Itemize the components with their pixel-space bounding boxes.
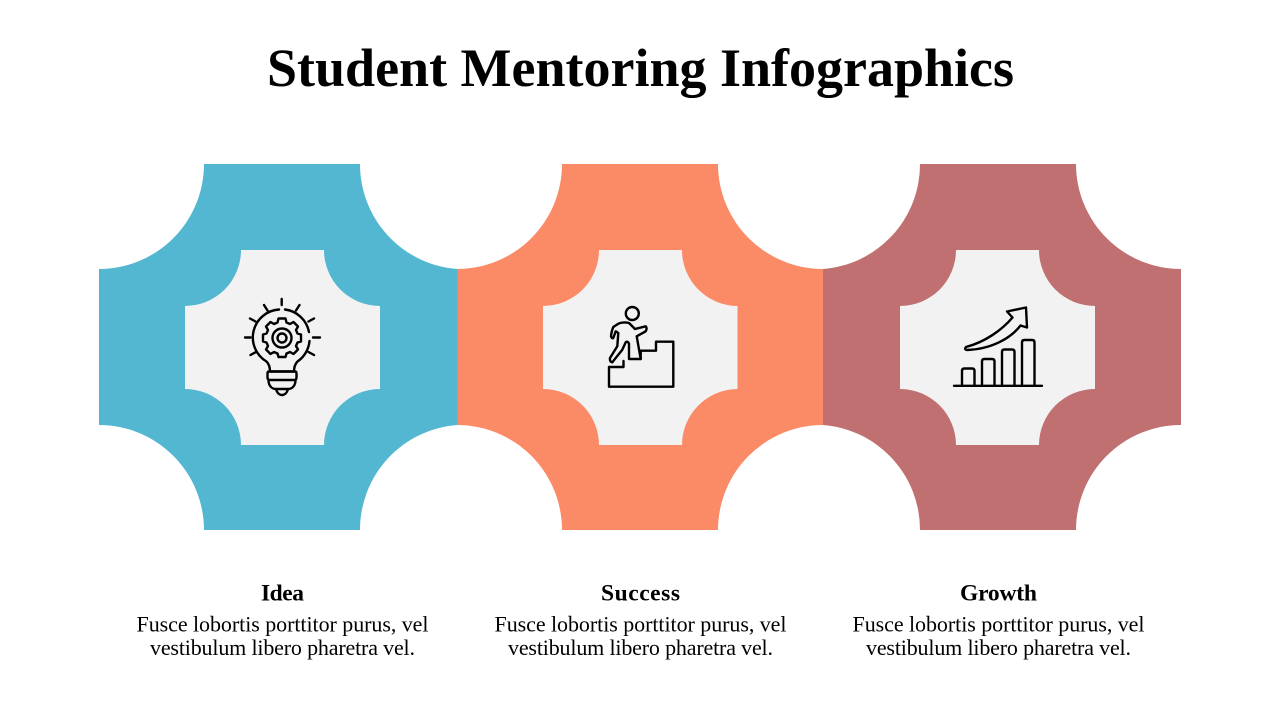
- inner tile: [543, 250, 738, 445]
- icon: rising bar chart with arrow: [954, 308, 1042, 386]
- panel: idea: [99, 164, 458, 660]
- description: success: [494, 612, 786, 660]
- description: growth: vestibulum libero pharetra vel.: [866, 635, 1131, 660]
- panel: growth: [823, 164, 1181, 660]
- description: growth: Fusce lobortis porttitor purus, vel: [852, 612, 1144, 636]
- panel: success: [458, 164, 823, 660]
- label: growth heading: Growth: [960, 580, 1037, 606]
- label: success heading: Success: [601, 580, 680, 606]
- description: idea: [136, 612, 428, 660]
- inner tile: [900, 250, 1095, 445]
- label: idea heading: Idea: [261, 580, 304, 606]
- orange puzzle shape: [458, 164, 823, 530]
- title: Student Mentoring Infographics: [267, 38, 1014, 98]
- description: success: Fusce lobortis porttitor purus, vel: [494, 612, 786, 636]
- icon: person climbing stairs: [609, 307, 673, 387]
- description: idea: Fusce lobortis porttitor purus, vel: [136, 612, 428, 636]
- inner tile: [185, 250, 380, 445]
- blue puzzle shape: [99, 164, 458, 530]
- red puzzle shape: [823, 164, 1181, 530]
- description: success: vestibulum libero pharetra vel.: [508, 635, 773, 660]
- description: idea: vestibulum libero pharetra vel.: [150, 635, 415, 660]
- description: growth: [852, 612, 1144, 660]
- icon: light bulb with gear: [245, 299, 320, 395]
